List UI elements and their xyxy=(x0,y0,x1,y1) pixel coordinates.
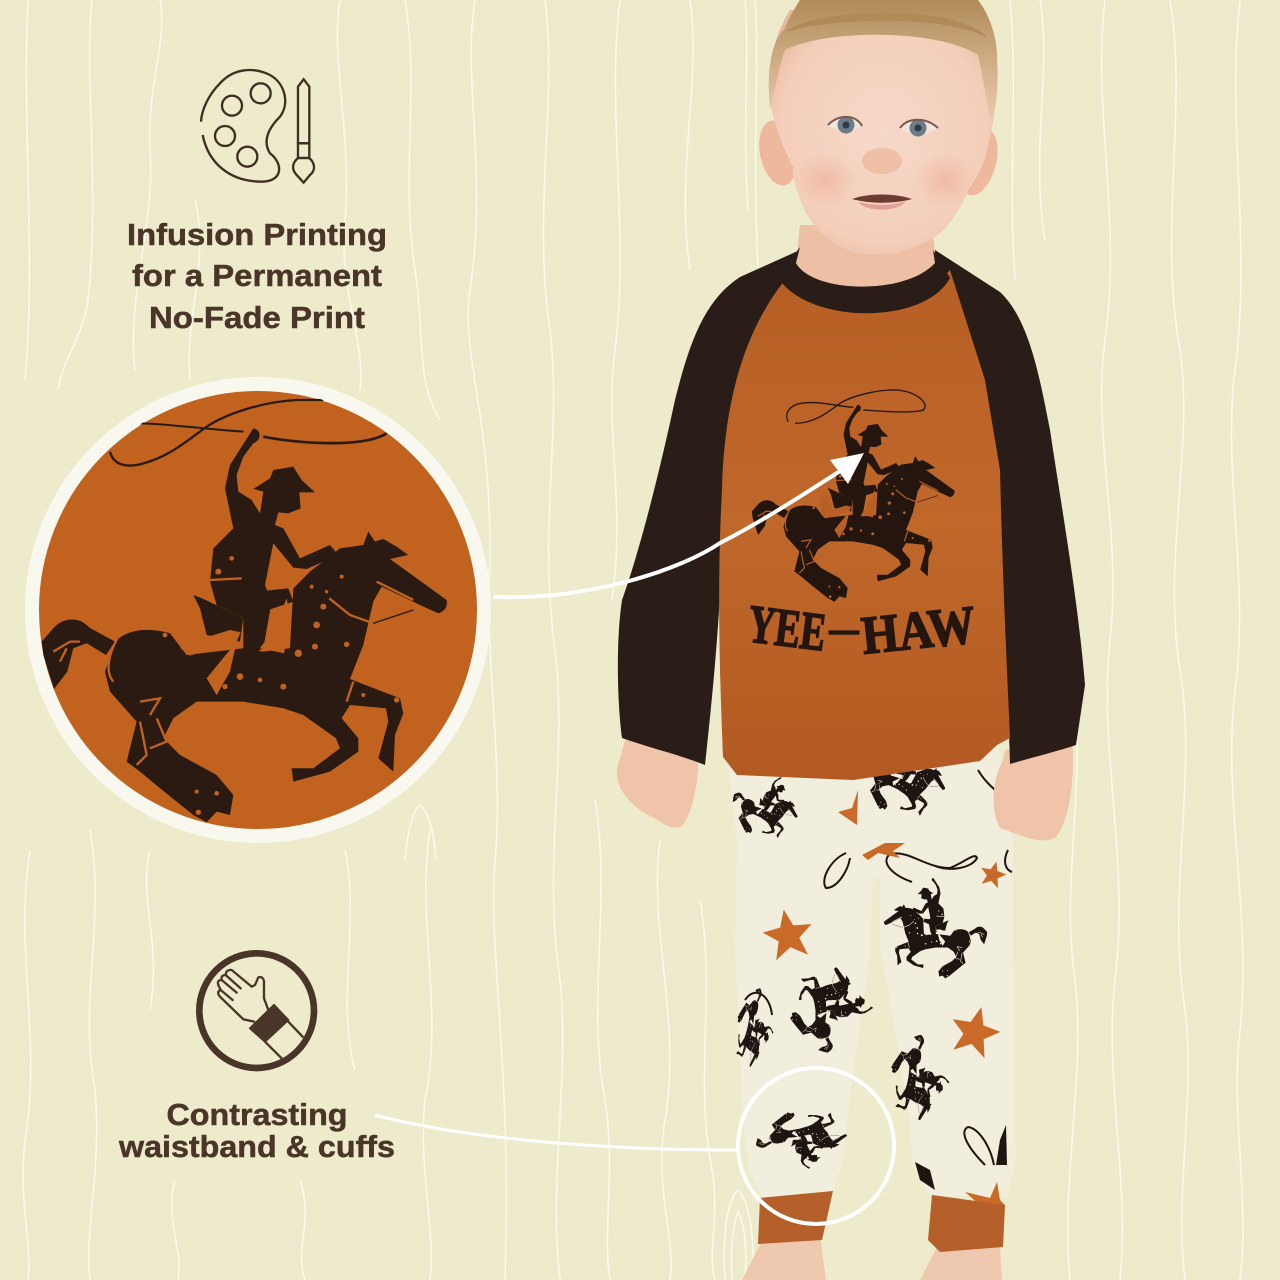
heading: infusion printing: Infusion Printing xyxy=(127,217,387,252)
heading: contrasting waistband xyxy=(118,1097,395,1164)
heading: contrasting waistband: waistband & cuffs xyxy=(118,1129,395,1164)
callout: zoomed print circle xyxy=(32,384,484,836)
heading: contrasting waistband: Contrasting xyxy=(166,1097,348,1132)
eyes xyxy=(828,116,938,136)
shirt print xyxy=(745,390,978,666)
shirt print: – xyxy=(829,606,859,651)
shirt body xyxy=(719,270,1010,780)
ears xyxy=(754,117,1004,199)
feet xyxy=(742,1235,1002,1280)
face xyxy=(770,8,997,255)
heading: infusion printing: for a Permanent xyxy=(132,258,382,293)
shirt print: YEE xyxy=(745,594,829,663)
photo: child in pajamas xyxy=(617,0,1085,1280)
heading: infusion printing xyxy=(127,217,387,335)
pant cuffs xyxy=(758,1191,1005,1252)
neck xyxy=(796,225,936,290)
hands xyxy=(617,730,1073,840)
icon: glove with cuff xyxy=(199,953,314,1068)
nose and mouth xyxy=(852,148,912,210)
shirt print: HAW xyxy=(859,594,978,666)
callout: cuff highlight xyxy=(375,1068,894,1224)
hair xyxy=(769,0,998,127)
shirt collar xyxy=(778,247,950,313)
pajama pants xyxy=(722,719,1015,1212)
arrow: print callout to shirt xyxy=(495,453,864,597)
heading: infusion printing: No-Fade Print xyxy=(149,300,365,335)
lassos xyxy=(745,770,1012,1165)
cheek blush xyxy=(793,152,975,208)
shirt sleeves xyxy=(618,250,1085,765)
icon: palette and brush xyxy=(201,70,314,183)
